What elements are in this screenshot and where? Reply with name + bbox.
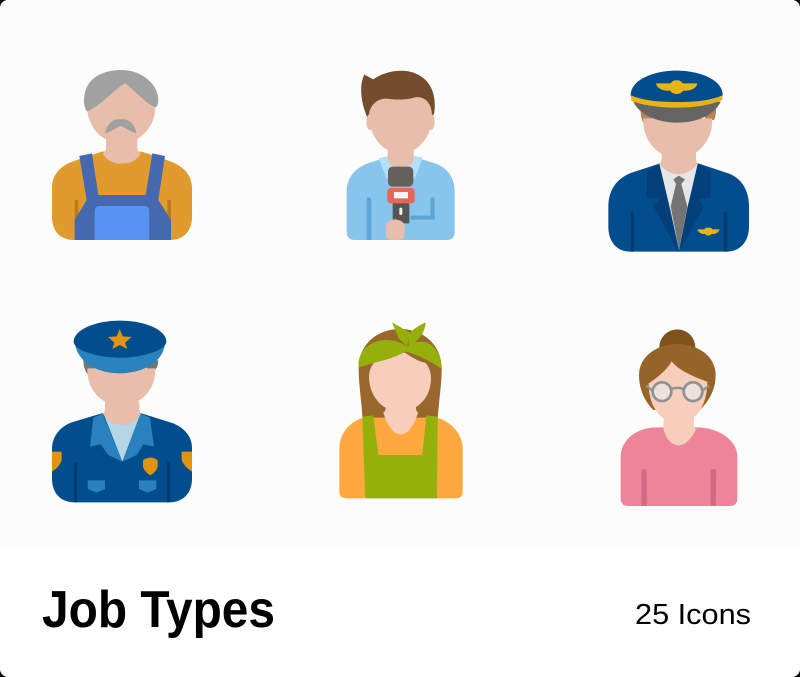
icon: news reporter with microphone <box>347 71 455 240</box>
title: Job Types <box>42 581 275 639</box>
icon: woman with glasses and hair bun <box>621 329 737 506</box>
icon: police officer <box>52 321 192 502</box>
icon: airline pilot <box>608 71 749 252</box>
icon: gardener woman with headband <box>339 322 463 498</box>
icon: farmer in overalls <box>52 70 192 240</box>
icon count label: 25 Icons <box>635 599 751 631</box>
